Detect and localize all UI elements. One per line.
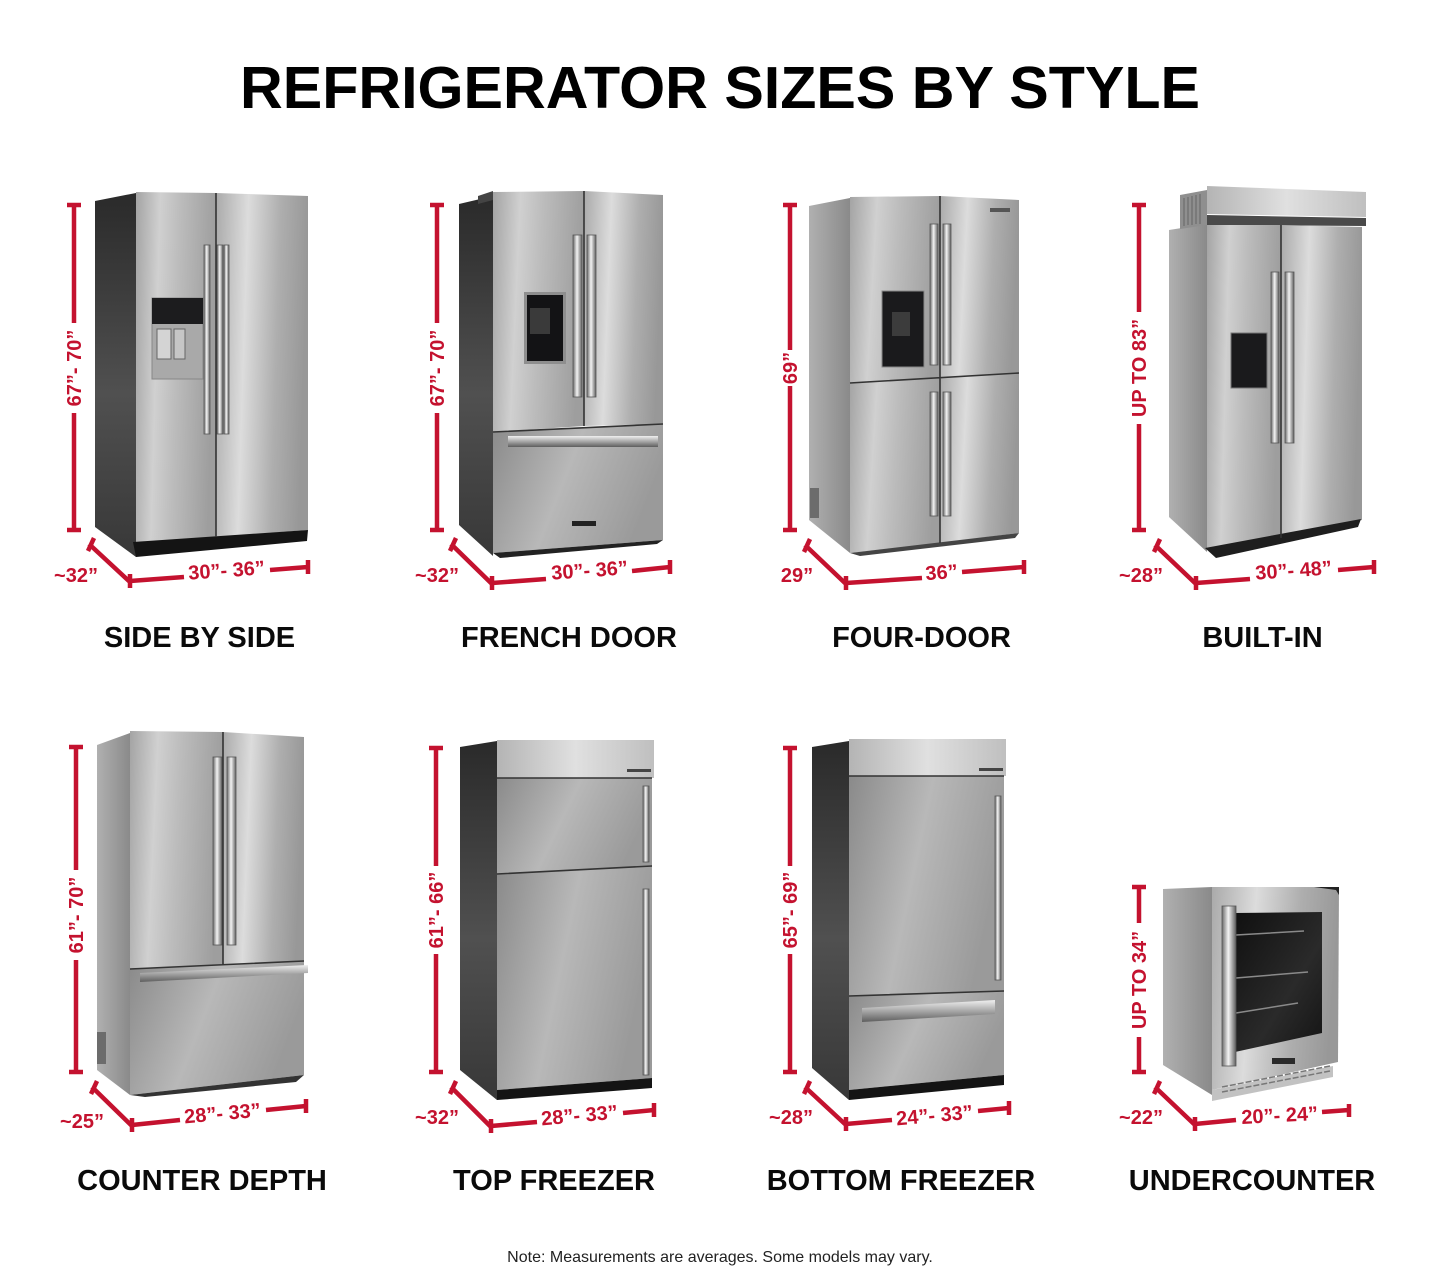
depth dimension: ~32” [415,1107,459,1129]
title: REFRIGERATOR SIZES BY STYLE [240,55,1200,121]
height dimension: UP TO 83” [1129,319,1151,417]
depth dimension [769,1081,846,1131]
height dimension: 61”- 70” [66,877,88,953]
width dimension [846,560,1024,585]
depth dimension: ~32” [54,565,98,587]
depth dimension [415,538,492,590]
refrigerator: bottom freezer [812,739,1006,1100]
height dimension [1129,205,1151,530]
width dimension [1195,1103,1349,1129]
depth dimension: ~25” [60,1111,104,1133]
refrigerator: undercounter [1163,887,1339,1101]
depth dimension: ~28” [769,1107,813,1129]
depth dimension [1119,539,1196,590]
refrigerator: side by side [95,192,308,557]
depth dimension [60,1081,132,1133]
depth dimension [415,1081,491,1133]
width dimension: 28”- 33” [183,1100,262,1128]
height dimension: 69” [780,352,802,384]
height dimension [1129,887,1151,1072]
panel: bottom freezer [767,739,1035,1197]
height dimension: 65”- 69” [780,872,802,948]
height dimension: UP TO 34” [1129,931,1151,1029]
label: SIDE BY SIDE [104,622,295,654]
panel: undercounter [1119,887,1375,1197]
refrigerator: french door [459,191,663,558]
width dimension: 30”- 48” [1255,557,1333,585]
depth dimension [1119,1081,1195,1131]
label: UNDERCOUNTER [1129,1165,1375,1197]
width dimension [130,557,308,585]
label: COUNTER DEPTH [77,1165,327,1197]
label: FOUR-DOOR [832,622,1011,654]
width dimension: 30”- 36” [551,557,629,585]
panel: side by side [54,192,308,654]
footnote: Note: Measurements are averages. Some models may vary. [507,1249,933,1266]
depth dimension: ~28” [1119,565,1163,587]
label: BUILT-IN [1202,622,1323,654]
width dimension: 36” [925,561,958,585]
width dimension: 24”- 33” [895,1102,974,1130]
width dimension [132,1099,306,1128]
height dimension [66,747,88,1072]
panel: french door [415,191,677,654]
panel: four-door [780,196,1024,654]
refrigerator: top freezer [460,740,654,1100]
width dimension [846,1101,1009,1130]
depth dimension: 29” [781,565,813,587]
panel: top freezer [415,740,655,1197]
height dimension [427,205,449,530]
height dimension [64,205,86,530]
height dimension: 67”- 70” [64,330,86,406]
depth dimension: ~22” [1119,1107,1163,1129]
refrigerator: counter depth [97,731,308,1097]
width dimension: 28”- 33” [540,1102,619,1130]
depth dimension [781,539,846,590]
label: FRENCH DOOR [461,622,677,654]
width dimension: 30”- 36” [188,557,266,585]
width dimension [492,557,670,585]
height dimension [780,205,802,530]
label: BOTTOM FREEZER [767,1165,1035,1197]
depth dimension [54,538,130,588]
width dimension [491,1102,654,1130]
height dimension: 67”- 70” [427,330,449,406]
width dimension [1196,557,1374,585]
height dimension [426,748,448,1072]
panel: counter depth [60,731,327,1197]
height dimension [780,748,802,1072]
height dimension: 61”- 66” [426,872,448,948]
width dimension: 20”- 24” [1241,1103,1319,1129]
panel: built-in [1119,186,1374,654]
refrigerator: built-in [1169,186,1366,558]
refrigerator: four-door [809,196,1019,556]
depth dimension: ~32” [415,565,459,587]
label: TOP FREEZER [453,1165,655,1197]
